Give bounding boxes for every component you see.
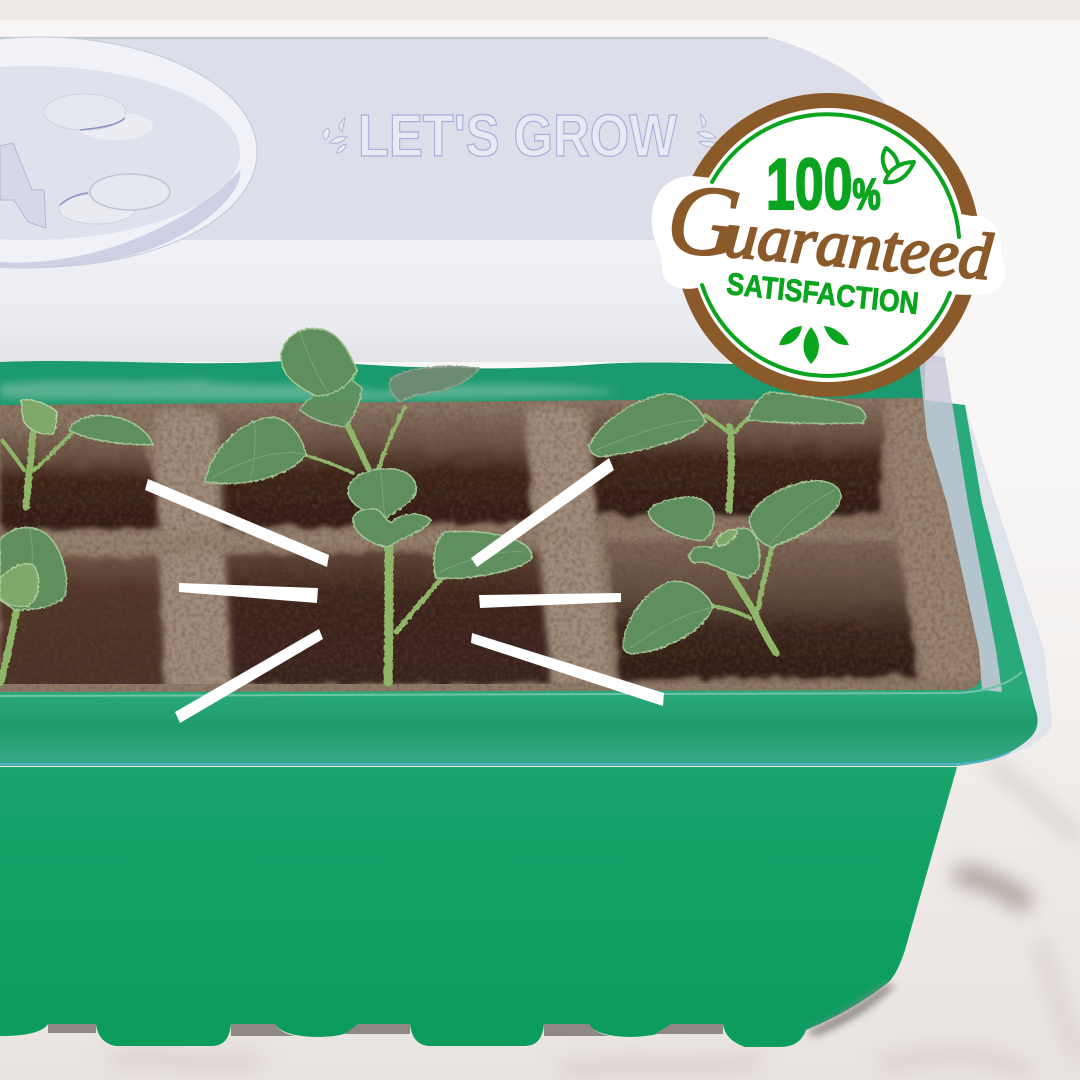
badge script word: Guaranteed xyxy=(663,162,999,301)
soil texture xyxy=(0,395,1000,695)
badge leaf sprout xyxy=(883,148,914,182)
row two soil cell right xyxy=(608,536,918,680)
badge white banner xyxy=(652,176,1005,295)
badge satisfaction text: SATISFACTION xyxy=(725,266,920,321)
row two soil cell left xyxy=(0,556,166,690)
clear lid front face xyxy=(0,240,945,362)
round vent on lid xyxy=(0,37,257,269)
plant: front right seedling xyxy=(623,481,841,654)
tray body xyxy=(0,767,957,1047)
wordmark splash left xyxy=(323,118,347,153)
lid top edge highlight xyxy=(0,37,768,39)
badge green arcs xyxy=(702,114,959,376)
peat dividers xyxy=(0,398,982,692)
embossed lid wordmark: LET'S GROW xyxy=(358,103,677,169)
rim upper highlight xyxy=(0,672,1022,696)
plant: rear centre seedling xyxy=(205,329,479,483)
guarantee badge xyxy=(652,93,1005,397)
plant: bottom left seedling xyxy=(0,528,66,682)
plant: front centre seedling xyxy=(348,469,532,682)
lid clear flange xyxy=(962,398,1052,757)
clear lid top panel xyxy=(0,37,940,240)
back rim of the tray xyxy=(0,360,925,410)
badge white disc xyxy=(691,108,965,382)
clear dome side tint xyxy=(918,352,1002,692)
white emphasis lines xyxy=(145,458,664,723)
vent dimple upper xyxy=(44,94,153,140)
row one soil cell left xyxy=(0,425,165,532)
row two soil cell middle xyxy=(222,553,552,686)
green rim of the tray xyxy=(0,400,1038,766)
row one soil cell middle xyxy=(216,412,535,532)
badge bottom leaves xyxy=(779,326,849,364)
plant: back right seedling xyxy=(589,392,866,510)
vent dimple lower xyxy=(59,174,170,224)
badge brown ring xyxy=(676,93,980,397)
plant: far left seedling xyxy=(2,400,153,507)
vent handle fin xyxy=(0,143,46,228)
shadow under tray xyxy=(48,985,896,1036)
row one soil cell right xyxy=(590,402,884,515)
badge 100 percent: 100% xyxy=(766,145,881,225)
front peat lip xyxy=(0,684,990,692)
peat seed tray xyxy=(0,395,1000,695)
wordmark splash right xyxy=(697,114,718,147)
rim lower highlight xyxy=(0,752,1010,764)
